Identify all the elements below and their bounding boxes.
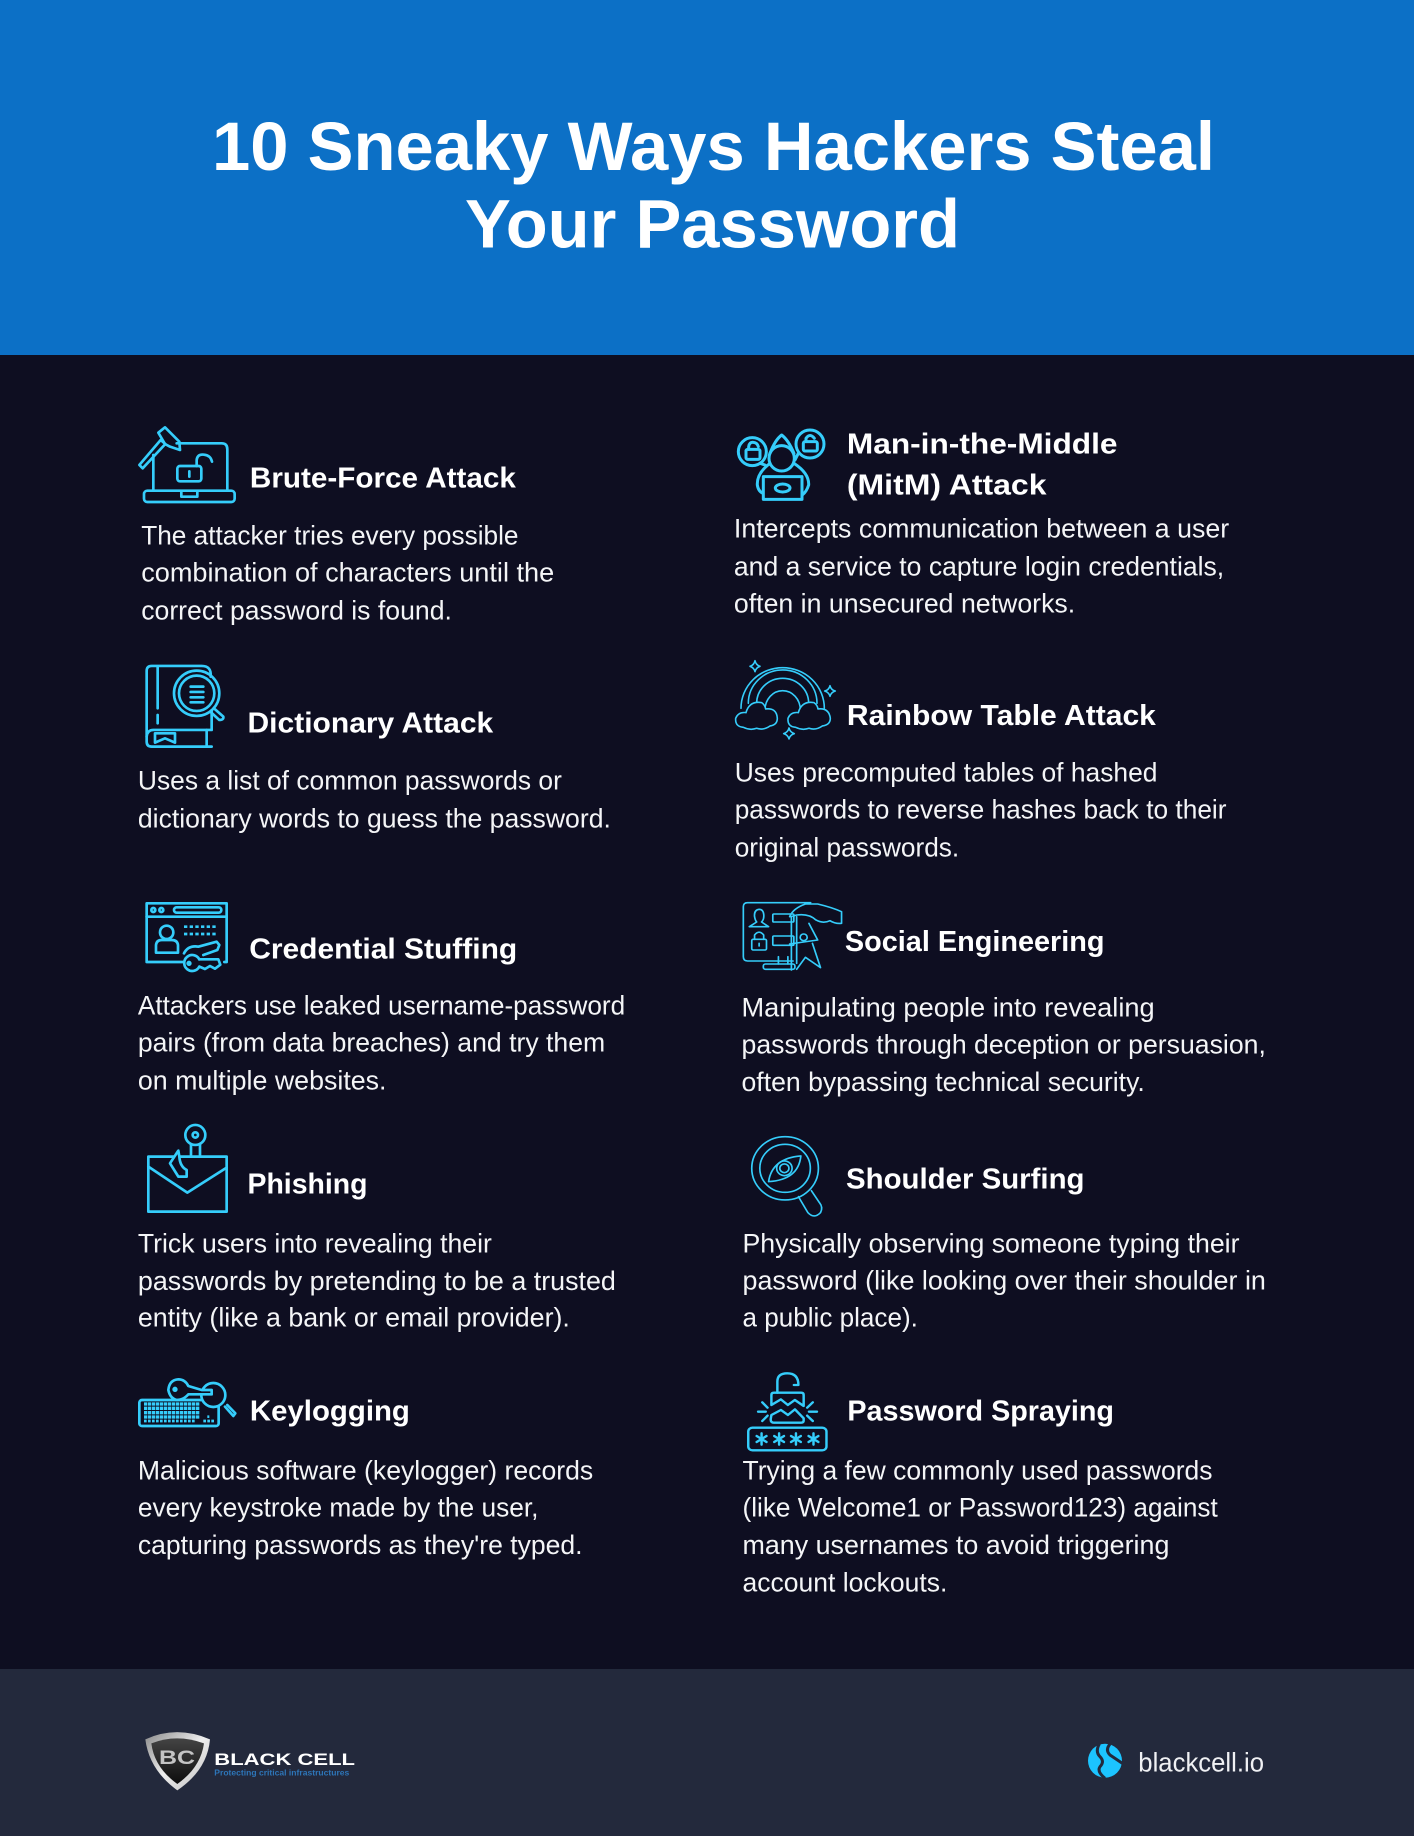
- description: [742, 1229, 1266, 1333]
- description: correct password is found.: [141, 595, 452, 625]
- heading: Phishing: [248, 1168, 367, 1200]
- heading: [847, 428, 1118, 501]
- heading: Rainbow Table Attack: [847, 700, 1157, 732]
- logo: Black Cell shield: Protecting critical infrastructures: [214, 1768, 350, 1778]
- panel: Social Engineering: [742, 903, 1266, 1097]
- description: many usernames to avoid triggering: [742, 1530, 1169, 1560]
- description: often in unsecured networks.: [734, 589, 1075, 619]
- description: [742, 993, 1266, 1097]
- description: Physically observing someone typing their: [742, 1229, 1240, 1259]
- panel: Man-in-the-Middle Attack: [734, 428, 1229, 619]
- description: password (like looking over their shoulder in: [742, 1265, 1266, 1295]
- description: passwords to reverse hashes back to their: [735, 794, 1227, 824]
- description: original passwords.: [735, 833, 959, 863]
- description: every keystroke made by the user,: [138, 1493, 538, 1523]
- icon: broken padlock with masked password: [748, 1373, 826, 1450]
- description: on multiple websites.: [138, 1065, 386, 1095]
- heading: Shoulder Surfing: [846, 1163, 1085, 1195]
- icon: book with magnifier: [147, 666, 223, 747]
- description: [734, 514, 1229, 619]
- panel: Rainbow Table Attack: [735, 661, 1227, 863]
- panel: Credential Stuffing: [138, 903, 625, 1095]
- description: dictionary words to guess the password.: [138, 803, 611, 833]
- description: pairs (from data breaches) and try them: [138, 1028, 605, 1058]
- description: Malicious software (keylogger) records: [138, 1455, 593, 1485]
- icon: envelope with hook: [148, 1125, 227, 1212]
- header banner: [0, 0, 1414, 355]
- description: [735, 758, 1227, 863]
- description: [138, 1229, 616, 1333]
- panel: Phishing: [138, 1125, 616, 1333]
- panel: Dictionary Attack: [138, 666, 611, 833]
- panel: Password Spraying: [742, 1373, 1218, 1598]
- icon: hooded hacker with locks: [738, 430, 824, 499]
- description: combination of characters until the: [141, 558, 554, 588]
- description: passwords through deception or persuasion,: [741, 1029, 1266, 1059]
- panel: Brute-Force Attack: [139, 427, 554, 625]
- description: and a service to capture login credentials,: [734, 552, 1224, 582]
- heading: Password Spraying: [847, 1396, 1114, 1428]
- heading: Dictionary Attack: [248, 708, 494, 740]
- description: [141, 520, 554, 625]
- panel: Keylogging: [138, 1379, 593, 1560]
- icon: globe: [1088, 1744, 1123, 1778]
- description: [742, 1455, 1218, 1598]
- description: Trick users into revealing their: [138, 1229, 492, 1259]
- icon: browser window with user and keys: [147, 903, 227, 971]
- icon: laptop with hammer and open lock: [139, 427, 235, 502]
- title: 10 Sneaky Ways Hackers Steal: [212, 108, 1215, 185]
- logo: Black Cell shield: BLACK CELL: [214, 1751, 355, 1769]
- description: entity (like a bank or email provider).: [138, 1303, 570, 1333]
- logo: Black Cell shield: [145, 1732, 355, 1790]
- description: passwords by pretending to be a trusted: [138, 1266, 616, 1296]
- logo: Black Cell shield: BC: [159, 1748, 195, 1769]
- description: often bypassing technical security.: [741, 1067, 1145, 1097]
- heading: Credential Stuffing: [249, 933, 517, 965]
- description: Attackers use leaked username-password: [138, 990, 625, 1020]
- heading: (MitM) Attack: [847, 469, 1047, 501]
- heading: Brute-Force Attack: [250, 463, 517, 495]
- title: Your Password: [465, 186, 960, 263]
- description: Manipulating people into revealing: [741, 993, 1155, 1023]
- icon: rainbow with clouds and stars: [736, 661, 835, 739]
- icon: monitor with hand and puppet figure: [743, 903, 842, 970]
- heading: Man-in-the-Middle: [847, 428, 1118, 460]
- description: capturing passwords as they're typed.: [138, 1530, 582, 1560]
- description: The attacker tries every possible: [141, 520, 518, 550]
- description: Trying a few commonly used passwords: [742, 1455, 1213, 1485]
- heading: Social Engineering: [845, 926, 1105, 958]
- description: Intercepts communication between a user: [734, 514, 1229, 544]
- footer: [0, 1669, 1414, 1836]
- heading: Keylogging: [250, 1396, 410, 1428]
- website: blackcell.io: [1138, 1748, 1264, 1778]
- icon: keyboard with key and magnifier: [139, 1379, 235, 1426]
- description: a public place).: [742, 1303, 918, 1333]
- icon: magnifier with eye: [752, 1137, 822, 1216]
- description: Uses a list of common passwords or: [138, 765, 562, 795]
- description: [138, 1455, 593, 1560]
- description: Uses precomputed tables of hashed: [735, 758, 1158, 788]
- description: (like Welcome1 or Password123) against: [742, 1493, 1218, 1523]
- description: [138, 990, 625, 1095]
- panel: Shoulder Surfing: [742, 1137, 1266, 1333]
- description: [138, 765, 611, 833]
- title: [212, 108, 1215, 263]
- description: account lockouts.: [742, 1568, 947, 1598]
